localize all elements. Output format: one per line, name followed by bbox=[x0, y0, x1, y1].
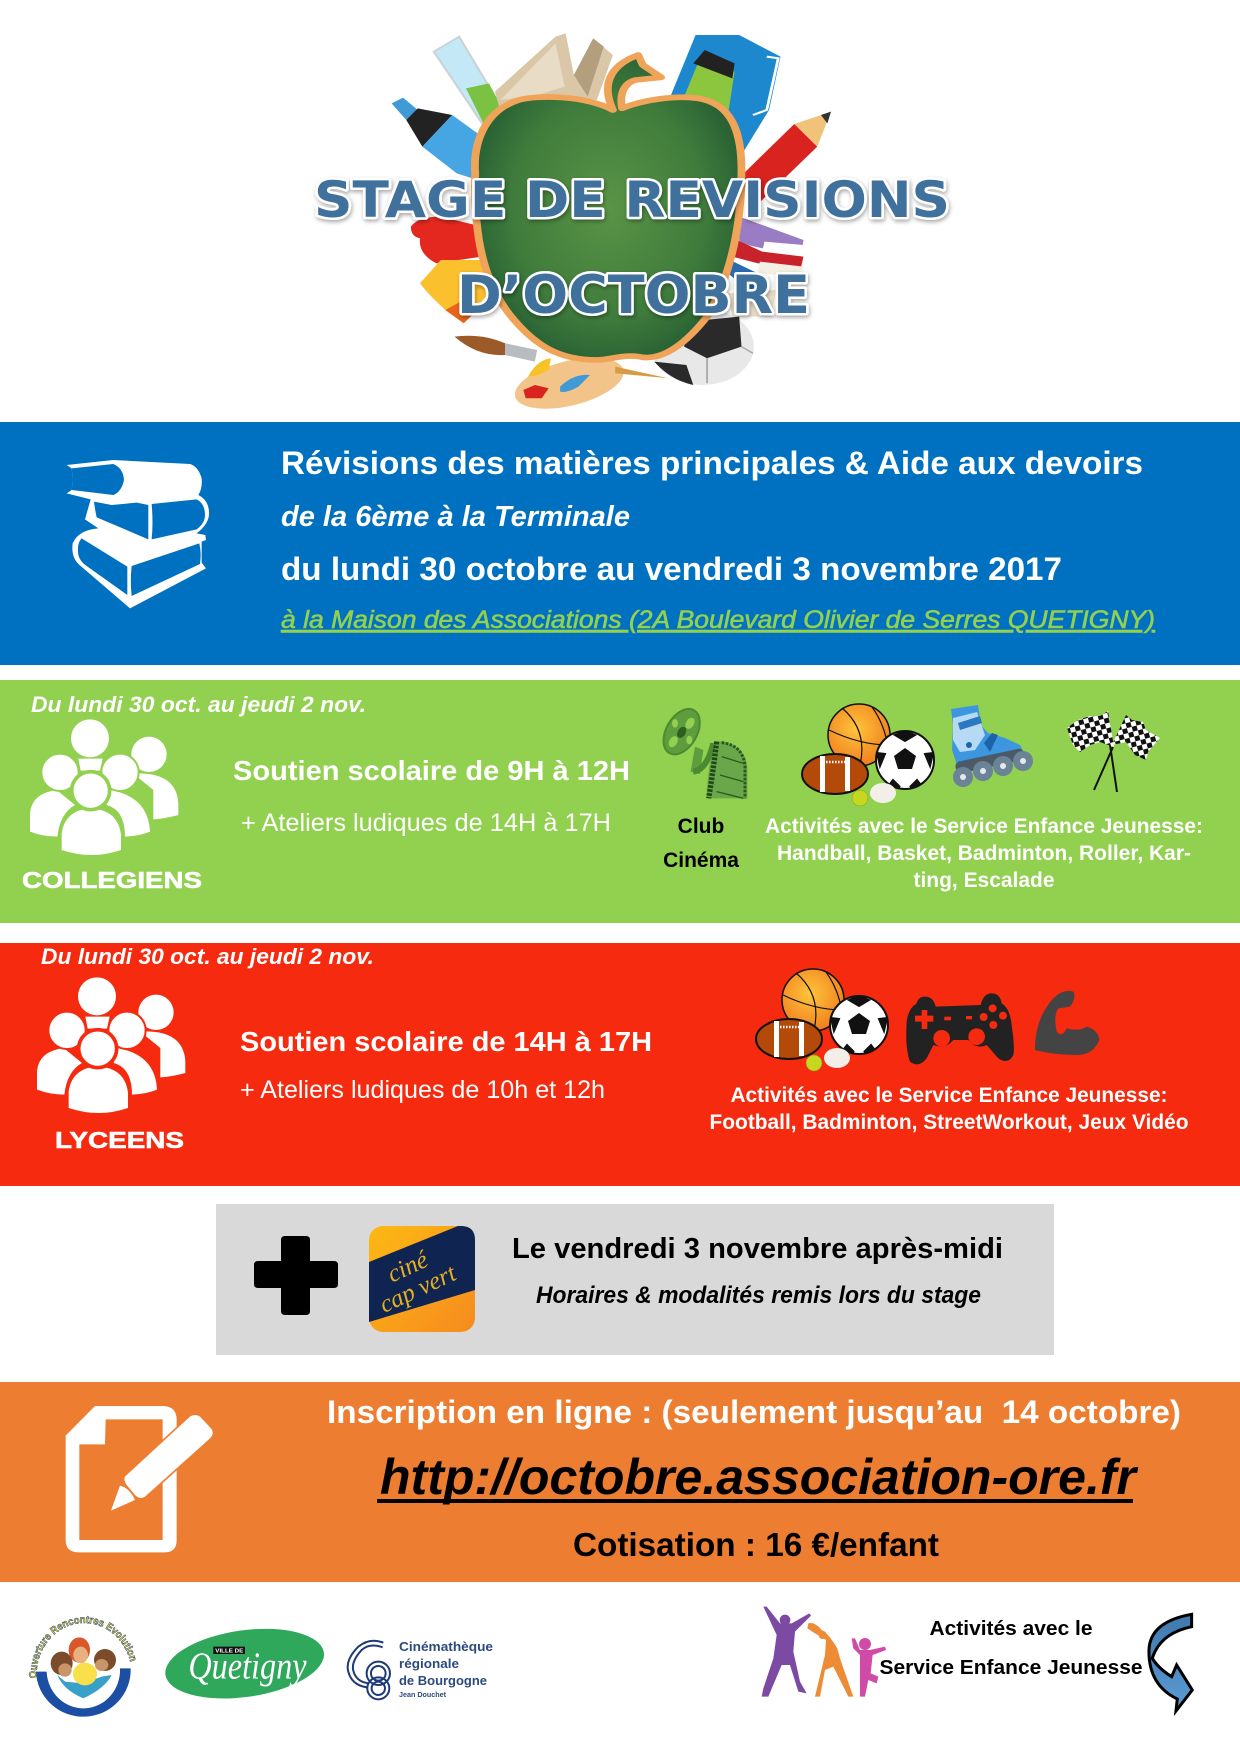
icon: pencil bbox=[744, 112, 831, 213]
logo: cinematheque bourgogne: Jean Douchet bbox=[399, 1690, 446, 1699]
panel: lyceens (red) bbox=[0, 943, 1240, 1186]
text: legend activities bbox=[880, 1618, 1142, 1679]
text: club cinema bbox=[663, 815, 739, 872]
text: activities lyceens bbox=[710, 1084, 1188, 1134]
title bbox=[314, 171, 950, 326]
logo: cinematheque bourgogne bbox=[348, 1639, 493, 1699]
logo: cine cap vert: cap vert bbox=[375, 1259, 461, 1319]
title: STAGE DE REVISIONS bbox=[314, 171, 950, 229]
logo: ville de quetigny: Quetigny bbox=[188, 1645, 307, 1687]
text: online registration: Inscription en ligne : (seulement jusqu’au 14 octobre) bbox=[327, 1394, 1181, 1430]
icon: apple blackboard bbox=[475, 55, 741, 360]
text: fee: Cotisation : 16 €/enfant bbox=[573, 1526, 939, 1563]
text: schedule note: Horaires & modalités remis lors du stage bbox=[536, 1282, 981, 1309]
text: school support hours: Soutien scolaire de 14H à 17H bbox=[240, 1026, 652, 1057]
text: activities lyceens: Activités avec le Service Enfance Jeunesse: bbox=[730, 1084, 1168, 1107]
heading: revisions: Révisions des matières principales & Aide aux devoirs bbox=[281, 445, 1143, 481]
logo: cinematheque bourgogne: de Bourgogne bbox=[399, 1673, 487, 1688]
footer logos bbox=[28, 1606, 1194, 1717]
text: legend activities: Activités avec le bbox=[930, 1618, 1092, 1640]
icon: roller skate bbox=[951, 705, 1033, 787]
text: club cinema: Cinéma bbox=[663, 849, 739, 872]
logo: cine cap vert bbox=[369, 1226, 475, 1332]
label: lyceens: LYCEENS bbox=[55, 1127, 184, 1153]
text: levels: de la 6ème à la Terminale bbox=[281, 501, 630, 533]
text: activities collegiens bbox=[765, 815, 1203, 892]
panel: general information (blue) bbox=[0, 422, 1240, 665]
panel: collegiens (green) bbox=[0, 680, 1240, 923]
text: workshops hours: + Ateliers ludiques de 10h et 12h bbox=[240, 1076, 605, 1104]
icon: test tube bbox=[434, 37, 505, 130]
icon: game controller bbox=[906, 993, 1014, 1064]
text: activities collegiens: Activités avec le Service Enfance Jeunesse: bbox=[765, 815, 1203, 838]
icon: sports balls bbox=[756, 969, 888, 1071]
icon: checkered flags bbox=[1067, 711, 1160, 792]
icon: sports balls bbox=[802, 704, 934, 806]
panel: registration (orange) bbox=[0, 1382, 1240, 1582]
icon: backpack bbox=[670, 35, 781, 155]
icon: red and yellow letters bbox=[411, 217, 491, 323]
text: lyceens dates: Du lundi 30 oct. au jeudi 2 nov. bbox=[41, 944, 374, 969]
text: club cinema: Club bbox=[678, 815, 724, 838]
icon: curved arrow bbox=[1149, 1614, 1192, 1711]
icon: open book bbox=[495, 33, 613, 112]
icon: plus sign bbox=[254, 1236, 338, 1315]
text: dates: du lundi 30 octobre au vendredi 3 novembre 2017 bbox=[281, 551, 1062, 587]
icon: highlighter bbox=[392, 98, 487, 180]
icon: flexed arm bbox=[1035, 991, 1099, 1055]
text: venue: à la Maison des Associations (2A Boulevard Olivier de Serres QUETIGNY) bbox=[281, 606, 1155, 634]
icon: soccer ball large bbox=[651, 308, 754, 385]
text: collegiens dates: Du lundi 30 oct. au jeudi 2 nov. bbox=[31, 692, 366, 717]
icon: group of people bbox=[37, 977, 185, 1113]
text: workshops hours: + Ateliers ludiques de 14H à 17H bbox=[241, 809, 611, 837]
label: collegiens: COLLEGIENS bbox=[22, 867, 202, 893]
icon: stack of books bbox=[67, 460, 209, 608]
icon: form and pencil bbox=[66, 1406, 213, 1552]
text: friday afternoon: Le vendredi 3 novembre après-midi bbox=[512, 1233, 1003, 1265]
logo: ore association bbox=[28, 1616, 136, 1717]
logo: cinematheque bourgogne: régionale bbox=[399, 1656, 459, 1671]
title: D’OCTOBRE bbox=[457, 265, 810, 326]
logo: ville de quetigny: VILLE DE bbox=[215, 1648, 244, 1654]
text: legend activities: Service Enfance Jeunesse bbox=[880, 1657, 1142, 1679]
icon: film reel bbox=[656, 703, 747, 798]
panel: cinema outing (grey) bbox=[216, 1204, 1054, 1355]
logo: cinematheque bourgogne: Cinémathèque bbox=[399, 1639, 493, 1654]
header illustration: apple blackboard and school items bbox=[392, 33, 831, 419]
icon: stack of books bbox=[728, 217, 803, 317]
logo: ville de quetigny bbox=[161, 1620, 328, 1708]
icon: dancing figures bbox=[762, 1607, 886, 1697]
text: activities collegiens: Handball, Basket, Badminton, Roller, Kar- bbox=[777, 842, 1191, 865]
text: activities collegiens: ting, Escalade bbox=[914, 869, 1054, 892]
logo: cine cap vert: ciné bbox=[383, 1246, 433, 1288]
text: registration url: http://octobre.association-ore.fr bbox=[380, 1449, 1139, 1505]
text: school support hours: Soutien scolaire de 9H à 12H bbox=[233, 755, 630, 786]
icon: paint brush bbox=[454, 336, 537, 362]
text: activities lyceens: Football, Badminton, StreetWorkout, Jeux Vidéo bbox=[710, 1111, 1188, 1134]
icon: group of people bbox=[30, 719, 178, 855]
icon: painter palette bbox=[505, 348, 668, 419]
logo: ore association: Ouverture Rencontres Evolution bbox=[28, 1616, 136, 1678]
